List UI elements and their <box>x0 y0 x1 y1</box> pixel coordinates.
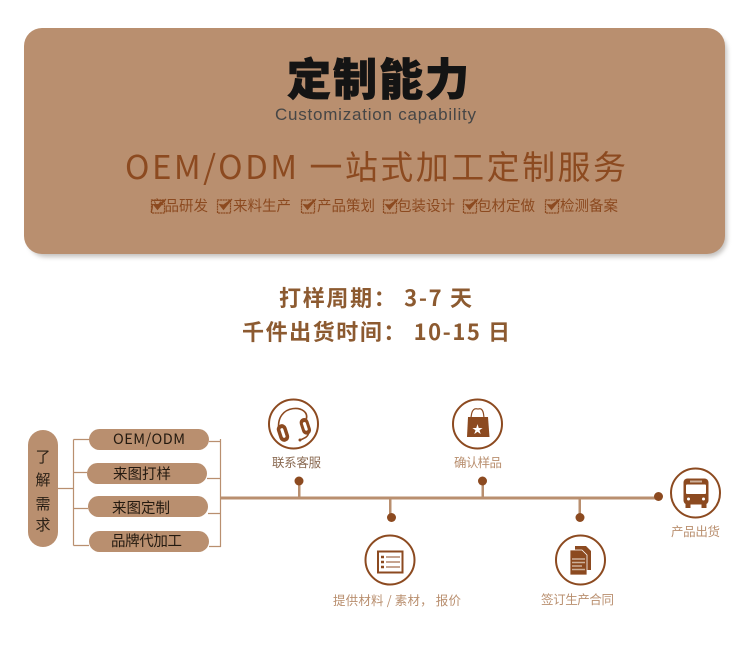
icon: documents <box>556 536 605 584</box>
item: 包材定做: 包材定做 <box>477 195 536 216</box>
pill: 了解需求 <box>28 430 58 547</box>
label: 产品出货: 产品出货 <box>671 521 720 540</box>
title: 定制能力 <box>287 44 469 108</box>
icon: shopping bag <box>453 400 502 448</box>
pill: 了解需求: 了 <box>35 446 51 467</box>
label: 签订生产合同: 签订生产合同 <box>541 589 614 608</box>
item: 包装设计: 包装设计 <box>397 195 455 216</box>
item: 产品研发: 产品研发 <box>150 195 208 216</box>
panel: header <box>24 28 727 257</box>
pill: 品牌代工: 品牌代加工 <box>111 530 182 551</box>
pill: 了解需求: 求 <box>35 514 51 535</box>
icon: headset <box>269 400 318 448</box>
item: 产品策划: 产品策划 <box>317 195 375 216</box>
pill: 了解需求: 需 <box>35 493 51 514</box>
label: 提供材料: 提供材料 / 素材， 报价 <box>333 590 461 609</box>
headline: OEM/ODM 一站式加工定制服务 <box>125 141 626 189</box>
pill: 来图打样: 来图打样 <box>113 463 171 484</box>
pill: OEM/ODM <box>89 428 209 450</box>
pill: 品牌代工 <box>89 530 209 552</box>
label: 联系客服: 联系客服 <box>272 452 321 471</box>
pill: OEM/ODM: OEM/ODM <box>113 428 185 449</box>
pill: 来图定制 <box>88 496 208 518</box>
left bracket <box>58 440 89 546</box>
sampling period text: 打样周期： 3-7 天 <box>279 281 472 313</box>
right bracket <box>207 439 221 547</box>
icon: bus <box>671 468 720 518</box>
bulk delivery text: 千件出货时间： 10-15 日 <box>242 315 510 347</box>
pill: 来图定制: 来图定制 <box>112 497 170 518</box>
item: 来料生产: 来料生产 <box>233 195 291 216</box>
icon: list <box>366 536 414 584</box>
item: 检测备案: 检测备案 <box>560 195 618 216</box>
timeline <box>220 476 663 522</box>
pill: 了解需求: 解 <box>35 469 51 490</box>
icon: shopping bag: ★ <box>472 424 483 436</box>
label: 确认样品: 确认样品 <box>454 452 502 471</box>
service list <box>150 195 618 216</box>
subtitle: Customization capability <box>275 105 476 124</box>
pill: 来图打样 <box>87 463 207 484</box>
